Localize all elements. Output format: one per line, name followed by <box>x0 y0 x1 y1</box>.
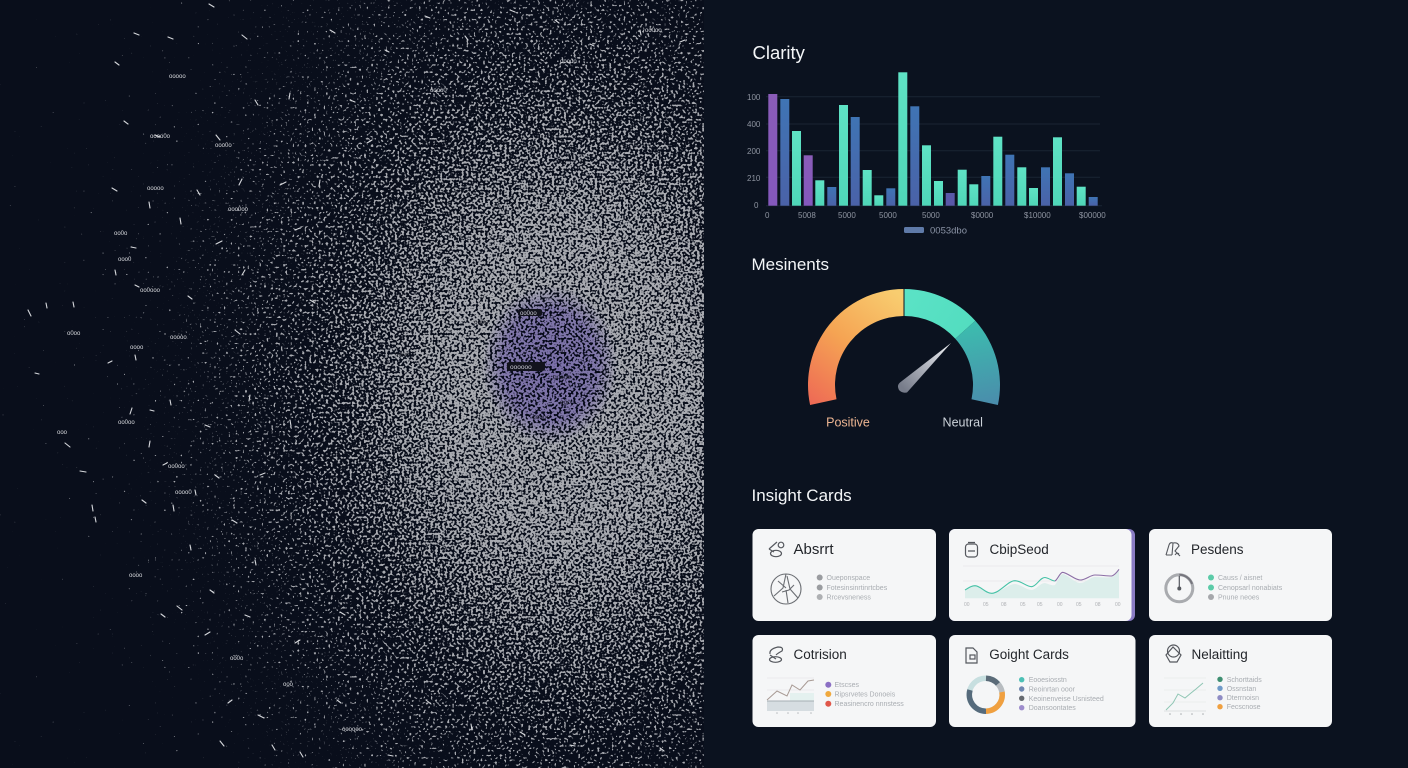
scattered data labels: ooooo <box>147 186 164 192</box>
label: positive: Positive <box>826 416 870 430</box>
purple cluster <box>482 285 618 445</box>
cluster tags: oo0oo <box>520 311 537 317</box>
y axis labels: 400 <box>747 120 761 129</box>
legend: Rrcevsneness <box>826 594 871 602</box>
scattered data labels: oooo <box>130 345 144 351</box>
dial <box>1166 575 1193 602</box>
legend: Reasinencro nnnstess <box>834 701 904 708</box>
area chart <box>963 566 1121 608</box>
cluster tags: ooooo <box>532 414 550 421</box>
x axis labels: 5000 <box>838 211 856 220</box>
x axis labels: $0000 <box>971 211 994 220</box>
grid lines <box>766 97 1102 206</box>
scattered data labels: o0oo <box>67 331 81 337</box>
area chart: 05 <box>983 602 989 608</box>
scattered data labels: oo0ooo <box>140 288 161 294</box>
x axis labels: 5000 <box>922 211 940 220</box>
legend: Cenopsarl nonabiats <box>1218 585 1283 592</box>
title: Cotrision <box>794 647 847 662</box>
cluster tags: oo0o <box>474 319 489 326</box>
x axis labels: 0 <box>765 211 770 220</box>
legend: Etscses <box>834 682 860 689</box>
legend: Reoinrtan ooor <box>1029 686 1076 694</box>
legend <box>817 574 888 602</box>
line chart <box>767 678 814 714</box>
cluster tags: oo <box>558 348 566 355</box>
legend: Ossnstan <box>1227 686 1256 693</box>
scattered data labels: ooooo <box>560 59 577 65</box>
y axis labels: 210 <box>747 174 761 183</box>
scattered data labels: ooooo <box>169 74 186 80</box>
scattered data labels: ooo0 <box>118 257 132 263</box>
scattered data labels: ooo <box>283 682 294 688</box>
legend <box>1019 677 1104 712</box>
legend <box>904 226 967 236</box>
scattered data labels: oo0oo <box>168 464 185 470</box>
heading: clarity: Clarity <box>752 42 806 63</box>
area chart: 05 <box>1076 602 1082 608</box>
card: nelaitting <box>1149 635 1332 727</box>
donut chart <box>969 678 1002 711</box>
label: neutral: Neutral <box>943 416 983 430</box>
legend <box>1208 574 1283 602</box>
area chart: 08 <box>1095 602 1101 608</box>
scattered data labels <box>57 28 662 733</box>
legend: Keoinenveise Usnisteed <box>1029 696 1104 703</box>
legend: Ripsrvetes Donoeis <box>834 692 896 698</box>
icon: folder <box>966 648 977 663</box>
legend: Fecscnose <box>1227 704 1261 711</box>
cluster tags: oooooo <box>510 364 532 371</box>
area chart: 05 <box>1037 602 1043 608</box>
panel: insight cards <box>752 486 1332 727</box>
scattered data labels: oooo <box>129 573 143 579</box>
legend: Schorttaids <box>1227 677 1262 684</box>
legend: Eooesiosstn <box>1029 677 1067 684</box>
legend <box>825 682 904 708</box>
legend: Doansoontates <box>1029 705 1076 712</box>
legend <box>1217 677 1262 711</box>
x axis labels: 5000 <box>879 211 897 220</box>
area chart: 05 <box>1020 602 1026 608</box>
title: Goight Cards <box>989 647 1069 662</box>
legend: Pnune neoes <box>1218 594 1260 602</box>
cluster tags: ooo <box>560 399 571 406</box>
scattered data labels: oooo0 <box>175 490 192 496</box>
y axis labels: 100 <box>747 93 761 102</box>
y axis labels: 0 <box>754 201 759 210</box>
cluster tags: oooo <box>395 351 410 358</box>
legend: 0053dbo <box>930 226 967 236</box>
scattered data labels: oo0oo <box>118 420 135 426</box>
scattered data labels: oooo0o <box>150 134 171 140</box>
scattered data labels: oo0o <box>230 656 244 662</box>
gauge arc: orange <box>808 289 904 405</box>
scattered data labels: ooo <box>57 430 68 436</box>
area chart: 00 <box>1057 602 1063 608</box>
card: goight cards <box>949 635 1136 727</box>
scattered data labels: ooo0o <box>215 143 232 149</box>
y axis labels <box>747 93 761 210</box>
x axis labels <box>765 211 1106 220</box>
scattered data labels: oooooo <box>342 727 363 733</box>
cluster tags: oo0 <box>533 345 544 352</box>
gauge needle <box>898 343 951 393</box>
card: pesdens <box>1149 529 1332 621</box>
icon: people <box>1166 543 1180 556</box>
legend: Oueponspace <box>826 575 870 582</box>
icon: shapes <box>770 647 782 662</box>
scattered data labels: ooo0oo <box>228 207 249 213</box>
card: cotrision <box>752 635 936 727</box>
legend: Fotesinsinrtinrtcbes <box>826 585 888 592</box>
scattered data labels: ooooo <box>170 335 187 341</box>
title: Pesdens <box>1191 542 1244 557</box>
cluster tags <box>395 309 571 421</box>
heading: insight cards: Insight Cards <box>752 486 852 505</box>
icon: circle glyph <box>771 574 801 604</box>
area chart: 00 <box>1115 602 1121 608</box>
panel: clarity bar chart <box>747 42 1106 236</box>
y axis labels: 200 <box>747 147 761 156</box>
panel: particle field <box>0 0 704 768</box>
scattered data labels: oooo0 <box>430 88 447 94</box>
scattered data labels: oo0oo <box>645 28 662 34</box>
title: CbipSeod <box>990 542 1049 557</box>
icon: cloud <box>769 542 784 557</box>
scattered dashes <box>28 4 692 757</box>
line chart <box>1164 678 1206 715</box>
x axis labels: $10000 <box>1024 211 1051 220</box>
legend: Dterrnoisn <box>1227 695 1259 702</box>
gauge arc: deep teal <box>955 321 1000 405</box>
cluster tags: ooooo <box>553 374 571 381</box>
x axis labels: $00000 <box>1079 211 1106 220</box>
area chart: 00 <box>964 602 970 608</box>
title: Nelaitting <box>1192 647 1248 662</box>
scattered data labels: oo0o <box>114 231 128 237</box>
speckle cloud <box>0 0 704 768</box>
area chart: 08 <box>1001 602 1007 608</box>
card: absrrt <box>752 529 936 621</box>
legend: Causs / aisnet <box>1218 575 1262 582</box>
bars <box>768 72 1098 206</box>
icon: knot <box>1166 645 1181 662</box>
gauge arc: teal <box>904 289 975 339</box>
title: Absrrt <box>794 541 834 558</box>
card: cbipseod <box>949 529 1135 621</box>
icon: clipboard <box>966 542 978 557</box>
heading: mesinents: Mesinents <box>752 255 829 274</box>
x axis labels: 5008 <box>798 211 816 220</box>
panel: sentiment gauge <box>752 255 1000 430</box>
